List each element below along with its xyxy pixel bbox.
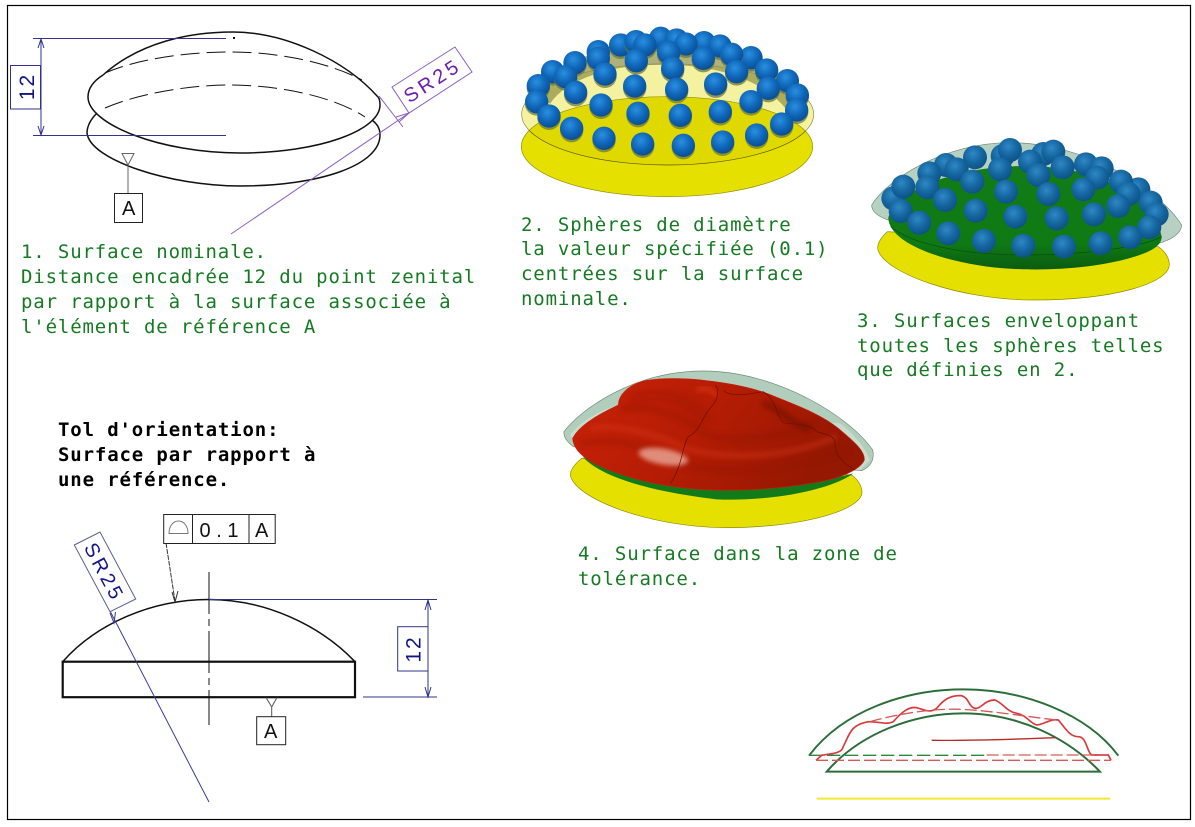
dimension SR25: SR25 bbox=[79, 539, 128, 606]
datum A bbox=[257, 698, 286, 745]
heading: orientation tolerance: Surface par rapport à bbox=[58, 444, 316, 466]
surface seam lines bbox=[671, 385, 855, 483]
translucent outer dome bbox=[872, 143, 1182, 243]
outer zone boundary bbox=[809, 689, 1118, 756]
yellow base disc bbox=[521, 97, 813, 197]
text: step 2: centrées sur la surface bbox=[521, 263, 804, 285]
dimension SR25 bbox=[74, 532, 209, 802]
text: step 4: tolérance. bbox=[578, 568, 701, 590]
feature control frame bbox=[164, 514, 275, 602]
dimension 12 bbox=[10, 38, 226, 136]
yellow base disc bbox=[878, 232, 1169, 300]
datum A: A bbox=[264, 721, 278, 743]
yellow datum line bbox=[817, 796, 1110, 802]
dome outline bbox=[87, 32, 380, 186]
dimension 12: 12 bbox=[16, 73, 39, 100]
panel: surface within tolerance zone bbox=[564, 371, 873, 528]
feature control frame: A bbox=[255, 520, 269, 542]
panel: dimensioned side view bbox=[63, 514, 437, 802]
green plate bbox=[888, 166, 1162, 269]
disc overlap tint bbox=[529, 99, 806, 166]
dimension 12: 12 bbox=[402, 635, 426, 663]
dome band behind spheres bbox=[542, 55, 797, 107]
text: step 1: l'élément de référence A bbox=[21, 316, 316, 338]
text: step 4 bbox=[578, 543, 898, 590]
yellow base disc bbox=[570, 458, 862, 528]
text: step 3 bbox=[857, 310, 1164, 381]
dimension SR25 bbox=[231, 47, 472, 234]
text: step 1: 1. Surface nominale. bbox=[21, 241, 267, 263]
text: step 2: la valeur spécifiée (0.1) bbox=[521, 238, 828, 260]
text: step 2: 2. Sphères de diamètre bbox=[521, 214, 792, 236]
section view: tolerance zone bbox=[809, 689, 1118, 799]
real surface profile bbox=[816, 696, 1111, 760]
panel: nominal surface drawing bbox=[10, 32, 472, 234]
panel: enveloping surfaces bbox=[872, 138, 1182, 300]
text: step 3: que définies en 2. bbox=[857, 359, 1078, 381]
dimension 12 bbox=[209, 600, 437, 697]
inner zone boundary bbox=[827, 713, 1100, 772]
text: step 3: 3. Surfaces enveloppant bbox=[857, 310, 1140, 332]
text: step 1 bbox=[21, 241, 476, 338]
text: step 1: par rapport à la surface associée à bbox=[21, 291, 451, 313]
real surface axis bbox=[932, 738, 1055, 740]
spheres bbox=[881, 138, 1169, 259]
zenith point bbox=[233, 37, 235, 39]
translucent outer dome bbox=[564, 371, 873, 471]
heading: orientation tolerance: Tol d'orientation: bbox=[58, 419, 279, 441]
text: step 2: nominale. bbox=[521, 288, 632, 310]
text: step 2 bbox=[521, 214, 828, 310]
text: step 4: 4. Surface dans la zone de bbox=[578, 543, 898, 565]
surface shading bbox=[580, 389, 850, 470]
text: step 1: Distance encadrée 12 du point zenital bbox=[21, 266, 476, 288]
panel: spheres on nominal surface bbox=[521, 27, 814, 197]
translucent upper disc bbox=[522, 64, 814, 165]
heading: orientation tolerance bbox=[58, 419, 316, 491]
red surface bbox=[573, 379, 864, 490]
real surface dashed line bbox=[816, 709, 1111, 760]
heading: orientation tolerance: une référence. bbox=[58, 469, 230, 491]
feature control frame: 0.1 bbox=[200, 520, 244, 542]
datum A bbox=[114, 154, 142, 222]
datum A: A bbox=[122, 198, 136, 220]
dimension SR25: SR25 bbox=[400, 55, 465, 108]
text: step 3: toutes les sphères telles bbox=[857, 335, 1164, 357]
part profile bbox=[63, 572, 355, 725]
spheres bbox=[525, 27, 809, 159]
zone dashed line bbox=[809, 753, 987, 757]
green plate rim bbox=[583, 457, 853, 500]
